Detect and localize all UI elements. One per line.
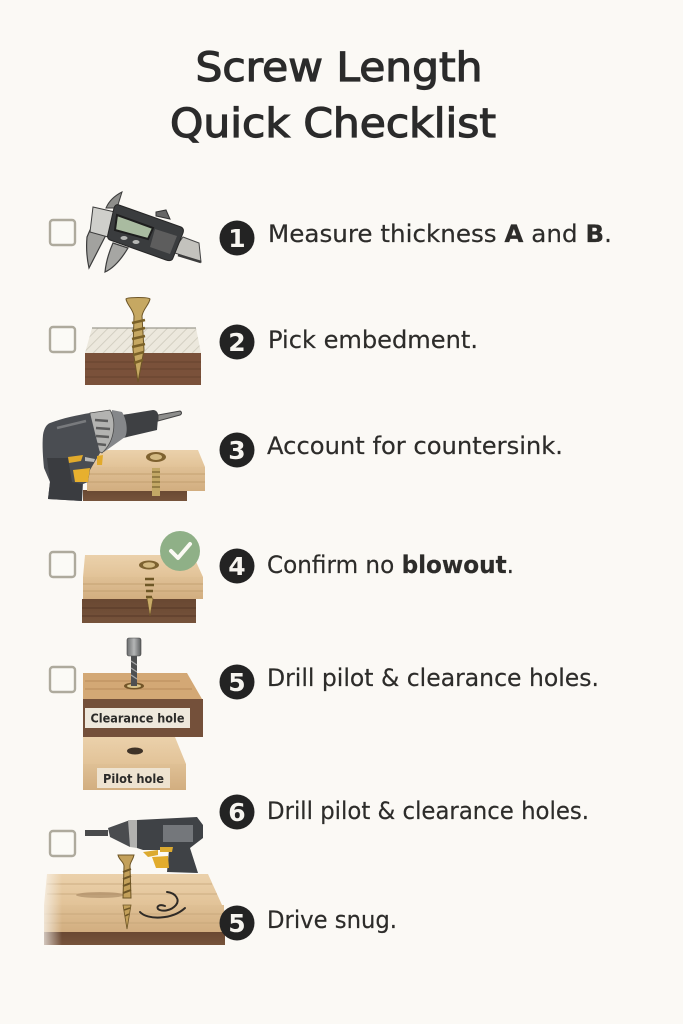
number badge 4 bbox=[220, 548, 254, 584]
icon: screw in board bbox=[85, 298, 201, 385]
icon: drill driving screw bbox=[44, 817, 225, 945]
icon: screw in boards bbox=[82, 531, 203, 623]
icon: green check bbox=[160, 531, 200, 571]
step 1: measure: 1 bbox=[228, 224, 246, 253]
step 4: blowout: 4 bbox=[228, 552, 246, 581]
title bbox=[170, 43, 496, 147]
step 3 text: Account for countersink. bbox=[267, 432, 563, 460]
checkbox 2 bbox=[50, 327, 75, 352]
number badge 5 bbox=[220, 664, 254, 700]
step 1 text: Measure thickness A and B. bbox=[268, 220, 612, 248]
step 6 text: Drill pilot & clearance holes. bbox=[267, 797, 589, 825]
number badge 5 repeated bbox=[220, 906, 254, 940]
checkbox 4 bbox=[50, 552, 75, 577]
step 2: embedment: 2 bbox=[228, 328, 246, 357]
step 4 text: Confirm no blowout. bbox=[267, 551, 514, 579]
checkbox 5 bbox=[50, 667, 75, 692]
step 5: pilot and clearance bbox=[50, 638, 599, 790]
icon: drill over boards bbox=[43, 410, 205, 501]
step 6: repeated drill text bbox=[220, 794, 589, 830]
icon: digital caliper bbox=[87, 192, 201, 272]
step 6: repeated drill text: 6 bbox=[228, 798, 246, 827]
number badge 3 bbox=[220, 432, 254, 468]
checkbox 6 bbox=[50, 831, 75, 856]
checkbox 1 bbox=[50, 220, 75, 245]
step 7: drive snug bbox=[44, 817, 397, 945]
label: pilot hole bbox=[97, 768, 170, 788]
step 2 text: Pick embedment. bbox=[268, 326, 478, 354]
number badge 6 bbox=[220, 794, 254, 830]
step 1: measure bbox=[50, 192, 612, 272]
label: clearance hole: Clearance hole bbox=[90, 710, 184, 726]
step 2: embedment bbox=[50, 298, 478, 385]
label: clearance hole bbox=[85, 708, 190, 728]
label: pilot hole: Pilot hole bbox=[103, 771, 164, 786]
step 3: countersink bbox=[43, 410, 563, 501]
step 4: blowout bbox=[50, 531, 514, 623]
title: Screw Length bbox=[196, 43, 482, 91]
icon: rotation swirl bbox=[140, 892, 185, 918]
step 3: countersink: 3 bbox=[228, 436, 246, 465]
step 7: drive snug: 5 bbox=[228, 909, 246, 938]
step 5 text: Drill pilot & clearance holes. bbox=[267, 664, 599, 692]
number badge 2 bbox=[220, 324, 254, 360]
step 5: pilot and clearance: 5 bbox=[228, 668, 246, 697]
number badge 1 bbox=[220, 220, 254, 256]
icon: drilled boards with labels bbox=[83, 638, 203, 790]
title: Quick Checklist bbox=[170, 99, 496, 147]
step 7 text: Drive snug. bbox=[267, 906, 397, 934]
